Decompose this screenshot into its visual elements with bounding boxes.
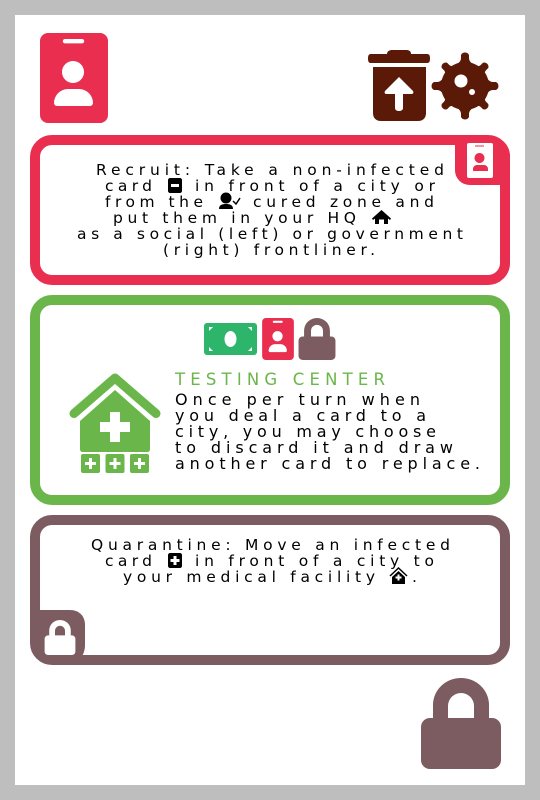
testing center text: you deal a card to a <box>175 406 426 425</box>
icon: plus card <box>168 553 182 568</box>
quarantine rule text: Quarantine: Move an infected <box>91 536 450 554</box>
recruit rule text: (right) frontliner. <box>163 241 375 259</box>
icon: home <box>372 210 391 224</box>
recruit rule text <box>77 161 463 259</box>
panel: quarantine <box>32 520 505 663</box>
cost icons <box>204 318 335 360</box>
testing center text: city, you may choose <box>175 422 436 441</box>
corner tab with id badge <box>455 137 510 185</box>
icon: trash with up arrow <box>368 50 430 121</box>
recruit rule text: from the <box>105 193 203 211</box>
recruit rule text: put them in your HQ <box>113 209 356 227</box>
quarantine rule text: . <box>412 568 417 586</box>
icon: testing center house <box>74 378 156 473</box>
icon: user with check <box>219 192 240 209</box>
testing center text: Once per turn when <box>175 390 420 409</box>
icon: lock <box>299 318 335 360</box>
recruit rule text: cured zone and <box>253 193 434 211</box>
icon: money bill <box>204 323 257 355</box>
icon: medical facility <box>390 568 407 584</box>
panel: testing center <box>35 300 505 500</box>
recruit rule text: in front of a city or <box>195 177 436 195</box>
small test tokens <box>81 454 149 473</box>
testing center text <box>175 390 480 473</box>
quarantine rule text: in front of a city to <box>195 552 434 570</box>
icon: minus card <box>168 178 182 193</box>
icon: id badge <box>262 318 294 360</box>
quarantine rule text: card <box>105 552 152 570</box>
recruit rule text: as a social (left) or government <box>77 225 463 243</box>
quarantine rule text: your medical facility <box>123 568 375 586</box>
icon: virus <box>432 53 498 119</box>
recruit rule text: Recruit: Take a non-infected <box>96 161 444 179</box>
icon: large lock <box>421 678 501 769</box>
testing center text: to discard it and draw <box>175 438 453 457</box>
corner tab with lock <box>32 610 85 663</box>
testing center heading: TESTING CENTER <box>174 370 385 389</box>
quarantine rule text <box>91 536 450 586</box>
testing center text: another card to replace. <box>175 454 480 473</box>
panel: recruit <box>35 137 510 280</box>
recruit rule text: card <box>105 177 152 195</box>
icon: recruit id badge <box>40 33 108 123</box>
